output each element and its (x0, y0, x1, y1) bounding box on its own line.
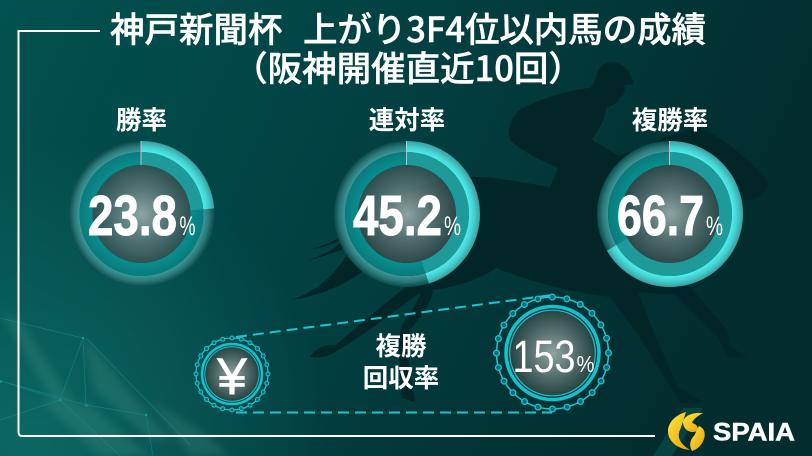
title: 上がり3F4位以内馬の成績 (303, 2, 706, 52)
panel: top-two rate (340, 100, 474, 282)
value: 23.8%: % (180, 211, 196, 241)
logo: SPAIA (668, 412, 795, 451)
title: （阪神開催直近10回） (233, 41, 583, 91)
panel: win rate (74, 100, 209, 282)
donut: 23.8% (74, 141, 209, 282)
icon: yen coin (196, 338, 268, 410)
donut: 66.7% (602, 141, 738, 282)
badge: 153%: 153 (512, 331, 576, 382)
label: return rate: 複勝 (375, 326, 427, 363)
value: 23.8%: 23.8 (88, 184, 177, 248)
badge: 153%: % (576, 351, 594, 377)
value: 66.7%: 66.7 (617, 184, 704, 248)
badge: 153% (496, 297, 608, 409)
frame line (18, 31, 655, 436)
value: 45.2%: 45.2 (353, 184, 442, 248)
label: win rate: 勝率 (116, 100, 167, 137)
value: 66.7%: % (706, 211, 723, 241)
donut: 45.2% (340, 141, 474, 282)
label: return rate: 回収率 (363, 358, 439, 395)
label: top-two rate: 連対率 (369, 100, 445, 137)
title: 神戸新聞杯 (110, 2, 282, 52)
background glow (0, 130, 330, 456)
wordmark: SPAIA (713, 418, 795, 446)
panel: top-three rate (602, 100, 738, 282)
label: top-three rate: 複勝率 (632, 100, 708, 137)
background light streaks (0, 312, 703, 456)
icon: logo swirl (668, 412, 705, 451)
horse and jockey silhouette (292, 62, 768, 403)
value: 45.2%: % (444, 211, 461, 241)
dashed connector lines (236, 295, 552, 412)
icon: yen coin: ¥ (216, 348, 247, 406)
title (110, 2, 706, 91)
label: return rate (363, 326, 439, 395)
